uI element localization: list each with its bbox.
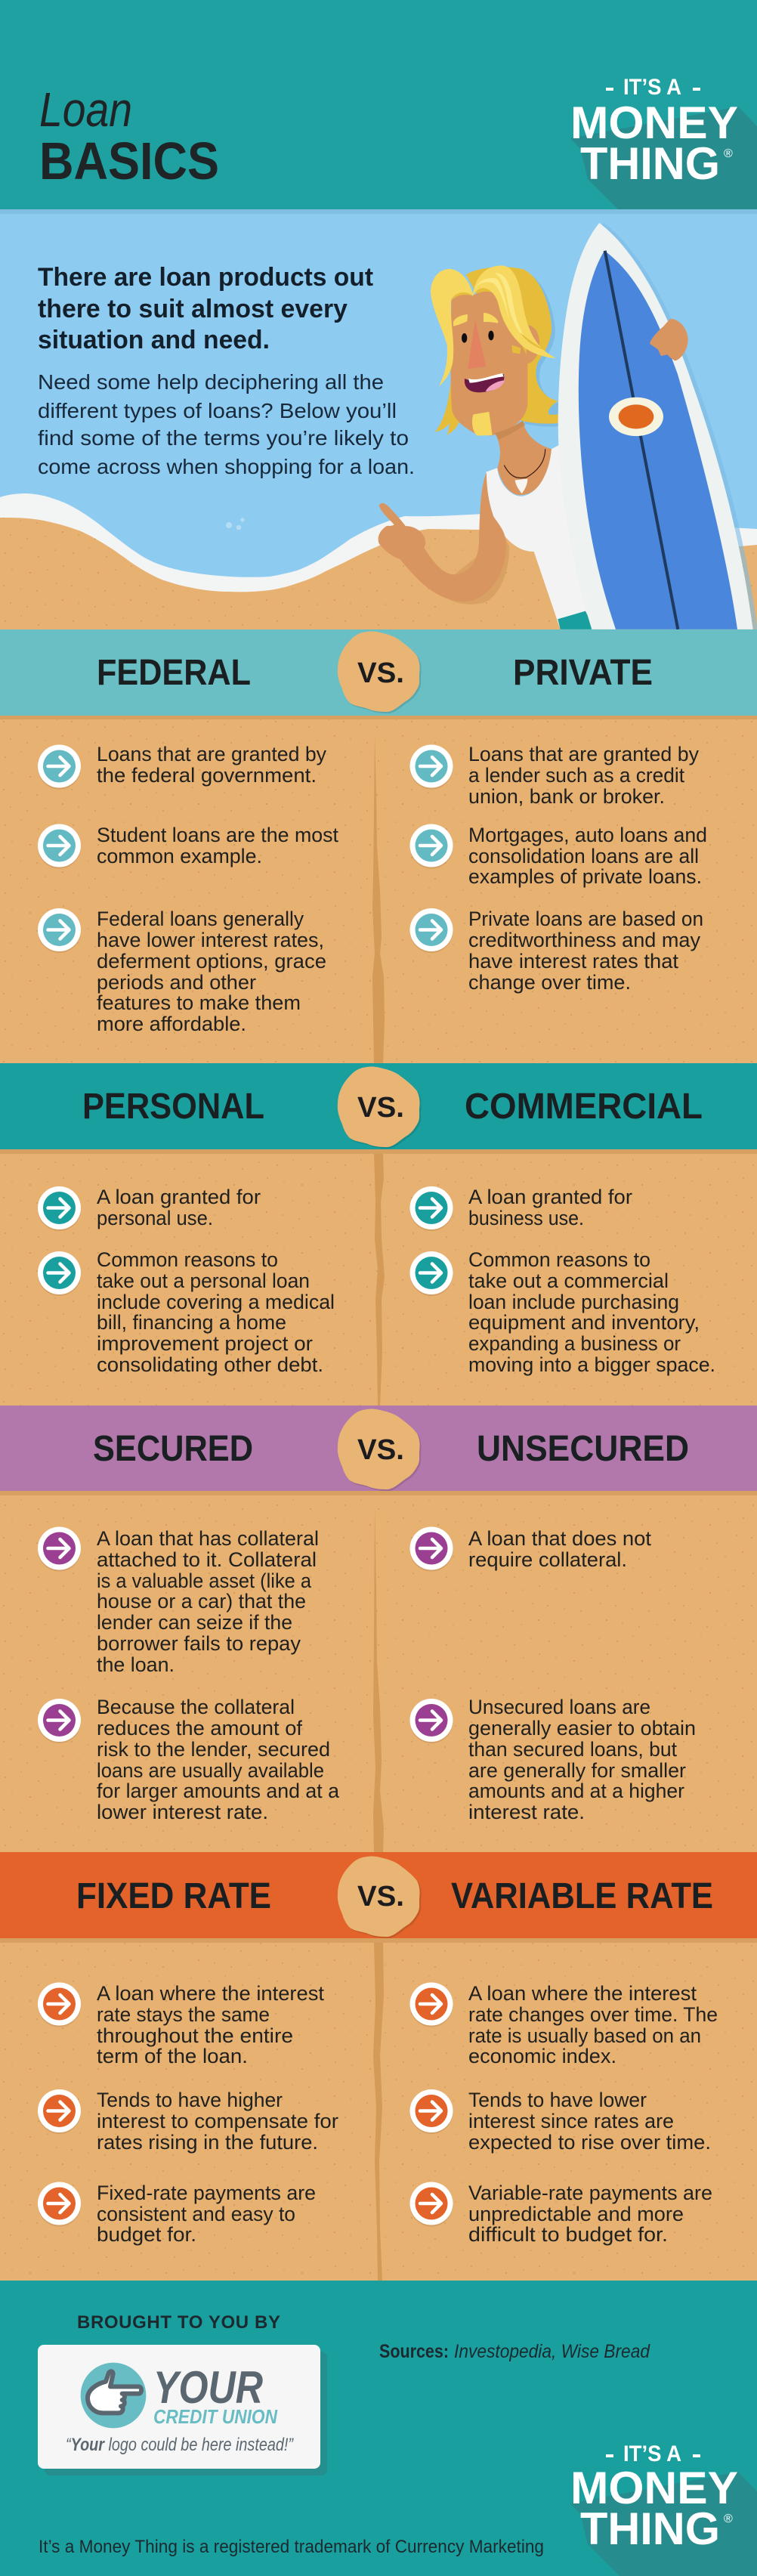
text block: throughout the entire (97, 2024, 293, 2047)
text block: consolidating other debt. (97, 1353, 323, 1376)
arm (400, 473, 506, 601)
mouth (465, 373, 505, 392)
text block: union, bank or broker. (468, 785, 665, 808)
logo: It's a Money Thing: ® (724, 147, 733, 160)
panel: federal vs private (0, 629, 757, 1035)
text block: the loan. (97, 1653, 175, 1676)
bullet icon (38, 1251, 81, 1296)
text block: interest since rates are (468, 2110, 674, 2132)
logo: It's a Money Thing: MONEY (570, 97, 738, 148)
neck (496, 425, 552, 495)
text block: Mortgages, auto loans and (468, 824, 707, 846)
intro heading: There are loan products out (38, 263, 373, 292)
illustration: surfer head (431, 266, 563, 440)
bullet icon (38, 824, 81, 869)
icon: pointing hand (81, 2363, 146, 2428)
title (39, 82, 219, 190)
brought to you by heading: BROUGHT TO YOU BY (77, 2312, 280, 2333)
intro heading: situation and need. (38, 326, 270, 354)
text block: deferment options, grace (97, 950, 326, 973)
goatee (472, 412, 493, 436)
text block: Unsecured loans are (468, 1696, 650, 1718)
hand on surfboard (650, 319, 688, 360)
sand background (0, 629, 757, 2284)
logo: It's a Money Thing: THING (580, 2503, 720, 2554)
text block: consolidation loans are all (468, 845, 699, 867)
ear (527, 325, 539, 364)
bullet icon (409, 2089, 453, 2134)
panel: secured vs unsecured (0, 1406, 757, 1823)
sources (379, 2341, 650, 2362)
text block: amounts and at a higher (468, 1780, 684, 1802)
sand (0, 518, 757, 629)
band: fixed rate vs variable rate: FIXED RATE (76, 1876, 271, 1916)
vs badge: VS. (357, 1092, 404, 1124)
unsecured column (409, 1526, 696, 1823)
secured column (38, 1526, 339, 1823)
logo: It's a Money Thing: IT’S A (623, 75, 681, 100)
fixed rate column (38, 1982, 338, 2246)
text block: attached to it. Collateral (97, 1548, 317, 1571)
intro heading (38, 263, 373, 354)
text block (468, 743, 700, 808)
illustration: surfboard and hand (558, 223, 757, 629)
text block: features to make them (97, 991, 301, 1014)
shirt (486, 444, 595, 629)
text block: lender can seize if the (97, 1611, 292, 1634)
text block: A loan where the interest (468, 1982, 697, 2005)
text block: economic index. (468, 2045, 616, 2067)
logo: It's a Money Thing (570, 75, 757, 209)
logo: It's a Money Thing: THING (580, 138, 720, 189)
text block (468, 1248, 715, 1376)
text block: examples of private loans. (468, 865, 702, 888)
band: federal vs private: PRIVATE (513, 653, 653, 693)
intro text: find some of the terms you’re likely to (38, 426, 409, 450)
arm shadow (436, 536, 509, 605)
bullet icon (38, 1526, 81, 1572)
text block: house or a car) that the (97, 1590, 306, 1613)
eyebrows (453, 313, 498, 326)
footer (0, 2281, 757, 2576)
hair front (431, 266, 556, 387)
band: fixed rate vs variable rate (0, 1852, 757, 1943)
text block: equipment and inventory, (468, 1311, 700, 1334)
sources: Investopedia, Wise Bread (454, 2341, 650, 2362)
illustration: surfer body (378, 425, 595, 629)
text block: common example. (97, 845, 262, 867)
text block: loan include purchasing (468, 1291, 679, 1313)
bullet icon (409, 1983, 453, 2027)
vs badge: VS. (357, 657, 404, 689)
trademark note: It’s a Money Thing is a registered trademark of Currency Marketing (39, 2537, 544, 2557)
text block (468, 824, 707, 888)
intro beach scene (0, 214, 757, 629)
text block: Loans that are granted by (97, 743, 327, 765)
text block: personal use. (97, 1207, 213, 1229)
text block (97, 743, 327, 787)
bullet icon (38, 745, 81, 789)
text block: rate changes over time. The (468, 2003, 718, 2026)
title: BASICS (39, 131, 219, 190)
bullet icon (38, 1983, 81, 2027)
text block (97, 1527, 319, 1676)
neck shade (495, 421, 525, 440)
bullet icon (38, 1186, 81, 1231)
text block: Loans that are granted by (468, 743, 700, 765)
text block: include covering a medical (97, 1291, 335, 1313)
face (451, 292, 527, 436)
text block: Common reasons to (468, 1248, 650, 1271)
text block (468, 1527, 652, 1571)
text block: take out a personal loan (97, 1269, 310, 1292)
text block: Common reasons to (97, 1248, 278, 1271)
text block: are generally for smaller (468, 1759, 686, 1782)
center crack: personal vs commercial (374, 1154, 385, 1406)
bullet icon (409, 1699, 453, 1743)
text block: expected to rise over time. (468, 2131, 711, 2154)
text block: term of the loan. (97, 2045, 248, 2067)
text block: generally easier to obtain (468, 1717, 696, 1739)
vs badge (338, 631, 422, 713)
text block: interest rate. (468, 1801, 585, 1823)
shorts (558, 611, 595, 629)
bullet icon (38, 2089, 81, 2134)
text block (97, 908, 326, 1035)
text block: consistent and easy to (97, 2203, 295, 2225)
surfboard (558, 223, 757, 629)
band: federal vs private: FEDERAL (97, 653, 251, 693)
text block: lower interest rate. (97, 1801, 268, 1823)
text block (468, 1982, 718, 2067)
text block: unpredictable and more (468, 2203, 684, 2225)
text block: Fixed-rate payments are (97, 2182, 316, 2204)
bullet icon (38, 908, 81, 953)
text block: expanding a business or (468, 1332, 681, 1355)
text block: Tends to have higher (97, 2089, 283, 2111)
text block (468, 1696, 696, 1823)
text block: rate stays the same (97, 2003, 270, 2026)
text block: A loan granted for (97, 1186, 261, 1208)
text block: take out a commercial (468, 1269, 669, 1292)
header banner (0, 0, 757, 214)
center crack: fixed vs variable (373, 1836, 384, 2282)
text block: creditworthiness and may (468, 929, 701, 951)
text block: business use. (468, 1207, 584, 1229)
logo: It's a Money Thing: MONEY (570, 2463, 738, 2513)
bullet icon (409, 1251, 453, 1296)
text block: improvement project or (97, 1332, 313, 1355)
sources: Sources: (379, 2341, 449, 2362)
text block (468, 908, 703, 994)
text block: change over time. (468, 971, 631, 994)
text block: A loan that does not (468, 1527, 652, 1550)
text block: A loan where the interest (97, 1982, 325, 2005)
text block: for larger amounts and at a (97, 1780, 339, 1802)
text block (97, 2089, 338, 2154)
private column (409, 743, 707, 994)
band: secured vs unsecured (0, 1406, 757, 1495)
text block (468, 2182, 712, 2246)
text block: the federal government. (97, 764, 317, 787)
pointing hand (378, 503, 425, 560)
bullet icon (38, 1699, 81, 1743)
text block: a lender such as a credit (468, 764, 685, 787)
vs badge: VS. (357, 1881, 404, 1913)
text block: risk to the lender, secured (97, 1738, 330, 1761)
wave foam (0, 493, 757, 612)
sponsor logo card (38, 2345, 327, 2475)
hair back (435, 267, 563, 435)
necklace (504, 449, 545, 493)
panel: fixed rate vs variable rate (0, 1852, 757, 2246)
text block: have lower interest rates, (97, 929, 324, 951)
vs badge: VS. (357, 1434, 404, 1466)
text block (468, 2089, 711, 2154)
text block: have interest rates that (468, 950, 679, 973)
text block: more affordable. (97, 1013, 246, 1035)
text block: is a valuable asset (like a (97, 1569, 311, 1592)
bullet icon (409, 745, 453, 789)
text block (97, 1248, 335, 1376)
text block: interest to compensate for (97, 2110, 338, 2132)
text block: rate is usually based on an (468, 2024, 701, 2047)
band: secured vs unsecured: UNSECURED (477, 1429, 689, 1469)
text block: borrower fails to repay (97, 1632, 301, 1655)
bullet icon (409, 824, 453, 869)
federal column (38, 743, 339, 1035)
vs badge (338, 1066, 422, 1149)
title: Loan (39, 82, 132, 137)
text block: than secured loans, but (468, 1738, 678, 1761)
band: personal vs commercial: PERSONAL (82, 1087, 264, 1127)
band: personal vs commercial (0, 1063, 757, 1154)
band: fixed rate vs variable rate: VARIABLE RATE (451, 1876, 713, 1916)
logo: It's a Money Thing (570, 2441, 757, 2576)
vs badge (338, 1409, 422, 1491)
center crack: federal vs private (372, 735, 385, 1065)
band: federal vs private (0, 629, 757, 719)
logo: It's a Money Thing: ® (724, 2513, 733, 2525)
text block: Federal loans generally (97, 908, 304, 930)
text block: moving into a bigger space. (468, 1353, 715, 1376)
intro heading: there to suit almost every (38, 295, 348, 323)
bullet icon (409, 908, 453, 953)
text block (97, 824, 339, 867)
text block (97, 1982, 325, 2067)
text block: bill, financing a home (97, 1311, 286, 1334)
text block (468, 1186, 632, 1229)
text block (97, 1186, 261, 1229)
text block: A loan that has collateral (97, 1527, 319, 1550)
text block: loans are usually available (97, 1759, 324, 1782)
nose (468, 320, 486, 369)
band: secured vs unsecured: SECURED (93, 1429, 253, 1469)
intro text (38, 370, 415, 478)
text block: Because the collateral (97, 1696, 295, 1718)
variable rate column (409, 1982, 718, 2246)
bullet icon (409, 1526, 453, 1572)
intro text: different types of loans? Below you’ll (38, 399, 397, 422)
logo tagline: “Your logo could be here instead!” (66, 2435, 294, 2455)
intro text: come across when shopping for a loan. (38, 455, 415, 478)
text block: reduces the amount of (97, 1717, 303, 1739)
commercial column (409, 1186, 715, 1376)
bubbles (226, 518, 245, 530)
vs badge (338, 1856, 422, 1938)
text block: budget for. (97, 2223, 196, 2246)
bullet icon (38, 2182, 81, 2226)
text block: Student loans are the most (97, 824, 339, 846)
text block: Tends to have lower (468, 2089, 647, 2111)
text block: require collateral. (468, 1548, 627, 1571)
personal column (38, 1186, 335, 1376)
bullet icon (409, 1186, 453, 1231)
text block: rates rising in the future. (97, 2131, 318, 2154)
text block (97, 1696, 339, 1823)
logo: It's a Money Thing: IT’S A (623, 2441, 681, 2466)
logo wordmark: YOUR (153, 2362, 263, 2413)
text block: periods and other (97, 971, 256, 994)
text block: Variable-rate payments are (468, 2182, 712, 2204)
bullet icon (409, 2182, 453, 2226)
text block: Private loans are based on (468, 908, 703, 930)
intro text: Need some help deciphering all the (38, 370, 384, 394)
eyes (462, 331, 494, 343)
logo wordmark: CREDIT UNION (153, 2405, 278, 2428)
text block (97, 2182, 316, 2246)
panel: personal vs commercial (0, 1063, 757, 1376)
text block: difficult to budget for. (468, 2223, 668, 2246)
center crack: secured vs unsecured (373, 1508, 384, 1853)
text block: A loan granted for (468, 1186, 632, 1208)
band: personal vs commercial: COMMERCIAL (465, 1087, 703, 1127)
